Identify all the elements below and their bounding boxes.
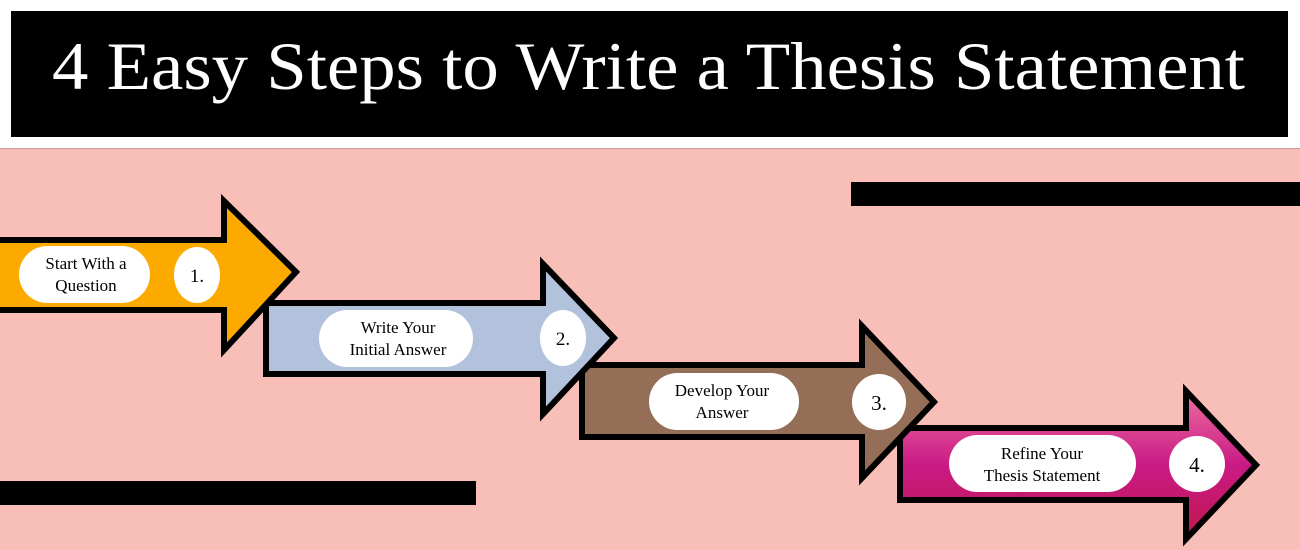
arrow step 1: Question: [55, 276, 117, 295]
arrow step 1: 1.: [190, 266, 204, 287]
arrow step 2: Initial Answer: [350, 340, 447, 359]
arrow step 3: Answer: [696, 403, 749, 422]
arrow step 3: 3.: [871, 391, 887, 415]
arrow step 1: Start With a: [45, 254, 127, 273]
arrow step 4: [900, 391, 1256, 539]
title: [11, 11, 1288, 137]
arrow step 3: Develop Your: [675, 381, 770, 400]
title: 4 Easy Steps to Write a Thesis Statement: [52, 28, 1245, 104]
arrow step 2: Write Your: [361, 318, 436, 337]
arrow step 2: [266, 264, 614, 414]
black bar top right: [851, 182, 1300, 206]
arrow step 2: 2.: [556, 329, 570, 350]
arrow step 3: [582, 326, 934, 478]
arrow step 4: Refine Your: [1001, 444, 1083, 463]
black bar bottom left: [0, 481, 476, 505]
arrow step 1: [0, 201, 296, 350]
arrow step 4: 4.: [1189, 453, 1205, 477]
arrow step 4: Thesis Statement: [984, 466, 1101, 485]
